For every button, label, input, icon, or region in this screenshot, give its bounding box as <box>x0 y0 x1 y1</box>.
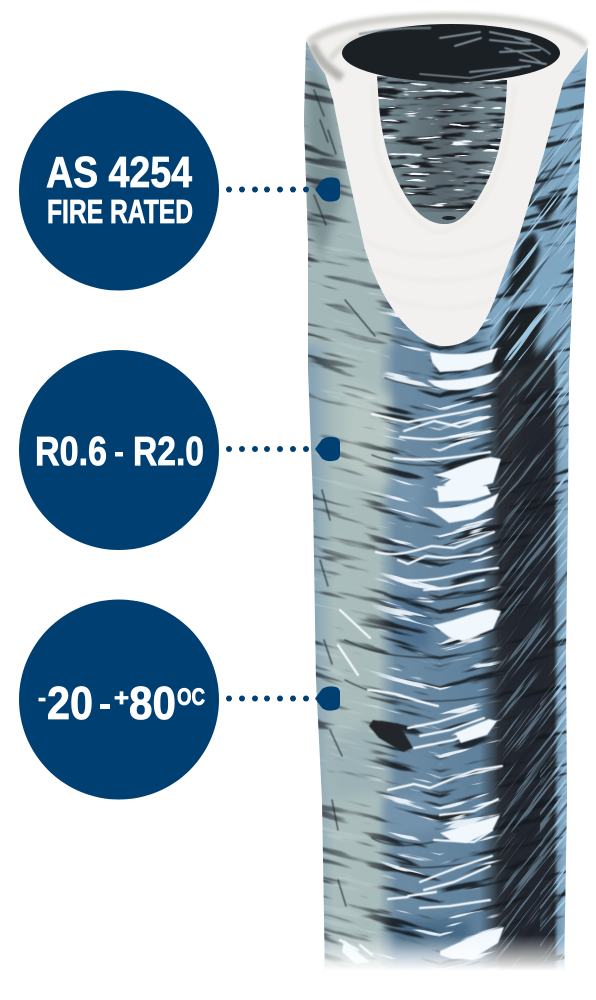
pointer marker <box>315 437 340 461</box>
insulation rim shading <box>309 16 586 308</box>
leader dots <box>226 186 309 192</box>
badge text: 80 <box>129 677 176 729</box>
wrinkle texture: silver creases <box>304 48 502 969</box>
badge text <box>35 428 204 474</box>
inner foil pocket <box>377 76 507 224</box>
bottom fade <box>324 936 564 971</box>
callout: AS 4254 fire rated <box>19 90 340 290</box>
dark blobs beside cut-out <box>490 190 565 372</box>
badge circle <box>19 90 219 290</box>
badge text: + <box>114 685 129 712</box>
badge text: R0.6 <box>35 428 107 474</box>
leader dots <box>226 696 309 702</box>
foil base <box>300 30 590 980</box>
dark patches <box>369 720 413 752</box>
pointer marker <box>315 177 340 202</box>
duct opening <box>342 24 560 82</box>
inner insulation wedge <box>306 14 588 346</box>
white creases <box>338 406 502 955</box>
badge text <box>46 148 193 231</box>
wrinkle texture: diagonal right band <box>490 112 583 967</box>
badge text <box>38 677 205 729</box>
dark wrinkles <box>314 90 502 906</box>
leader dots <box>226 446 309 452</box>
badge text: OC <box>177 684 205 711</box>
wrinkle texture: dark creases <box>304 54 586 968</box>
pointer marker <box>315 686 340 711</box>
badge text: FIRE RATED <box>47 194 193 231</box>
badge text: R2.0 <box>133 428 204 474</box>
badge text: 20 <box>47 677 93 729</box>
bright highlights <box>342 348 504 964</box>
photo: insulated foil duct <box>300 0 590 1000</box>
badge circle <box>19 600 219 800</box>
callout: R-value range <box>19 350 340 550</box>
badge text: AS 4254 <box>46 148 192 197</box>
callout: temperature range <box>19 600 340 800</box>
badge circle <box>19 350 219 550</box>
foil shading bands <box>300 50 590 960</box>
badge text: - <box>38 685 46 712</box>
